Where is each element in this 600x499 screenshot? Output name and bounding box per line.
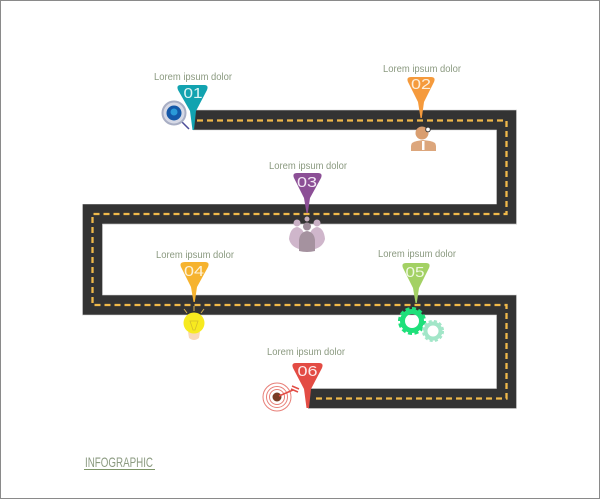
label: step 3: Lorem ipsum dolor [269,161,348,172]
pin: 04: 04 [184,263,204,280]
pin: 04 [180,262,209,302]
label: step 1: Lorem ipsum dolor [154,72,233,83]
icon: target [263,383,299,411]
footer title: INFOGRAPHIC [85,454,153,470]
pin: 06: 06 [298,363,318,380]
pin: 02: 02 [411,76,431,93]
pin: 05: 05 [406,264,424,281]
icon: light bulb [184,306,204,340]
label: step 5: Lorem ipsum dolor [378,249,457,260]
label: step 6: Lorem ipsum dolor [267,347,346,358]
pin: 06 [292,363,323,408]
pin: 05 [402,263,430,303]
label: step 4: Lorem ipsum dolor [156,250,235,261]
label: step 2: Lorem ipsum dolor [383,64,462,75]
winding road [92,120,506,398]
pin: 01 [177,85,208,130]
icon: group of people [289,216,325,252]
pin: 01: 01 [184,85,202,102]
icon: businessman [411,126,436,151]
icon: magnifying glass [162,102,189,129]
pin: 02 [407,76,435,118]
icon: gears [400,308,443,341]
pin: 03: 03 [297,174,317,191]
pin: 03 [293,173,322,213]
